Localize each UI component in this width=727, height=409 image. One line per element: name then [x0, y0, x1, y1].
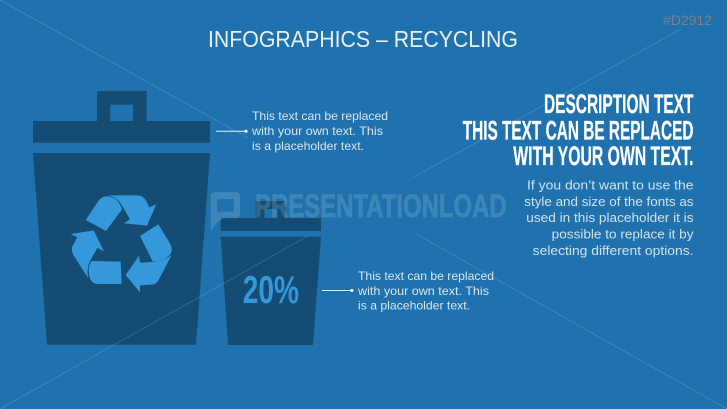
- watermark wordmark: PRESENTATIONLOAD: [255, 188, 507, 224]
- callout text: with your own text. This: [357, 284, 489, 298]
- icon: small bin with percentage: [221, 201, 321, 345]
- callout text: is a placeholder text.: [358, 298, 470, 312]
- connector line: [216, 130, 248, 133]
- connector line: [322, 289, 354, 292]
- description body text: style and size of the fonts as: [524, 194, 694, 209]
- description body text: selecting different options.: [533, 243, 694, 258]
- watermark: [211, 188, 507, 232]
- callout text: is a placeholder text.: [252, 139, 364, 153]
- small bin body: [221, 237, 321, 345]
- callout text: with your own text. This: [251, 124, 383, 138]
- callout text: This text can be replaced: [252, 109, 388, 123]
- small bin lid: [221, 218, 321, 231]
- callout: large bin: [216, 109, 391, 153]
- bin handle: [97, 91, 147, 121]
- callout: small bin: [322, 269, 497, 312]
- description body text: If you don’t want to use the: [527, 178, 694, 192]
- slide code: #D2912: [663, 12, 712, 28]
- bin body: [33, 153, 210, 345]
- callout text: This text can be replaced: [358, 269, 494, 283]
- icon: recycling symbol: [71, 195, 172, 293]
- description body text: used in this placeholder it is: [526, 210, 694, 225]
- description body text: possible to replace it by: [552, 227, 694, 242]
- percentage value: 20%: [243, 269, 299, 312]
- small bin handle: [256, 201, 285, 218]
- bin lid: [33, 121, 210, 143]
- icon: large recycling bin: [33, 91, 210, 345]
- title: INFOGRAPHICS – RECYCLING: [208, 26, 518, 52]
- watermark logo: [211, 192, 240, 232]
